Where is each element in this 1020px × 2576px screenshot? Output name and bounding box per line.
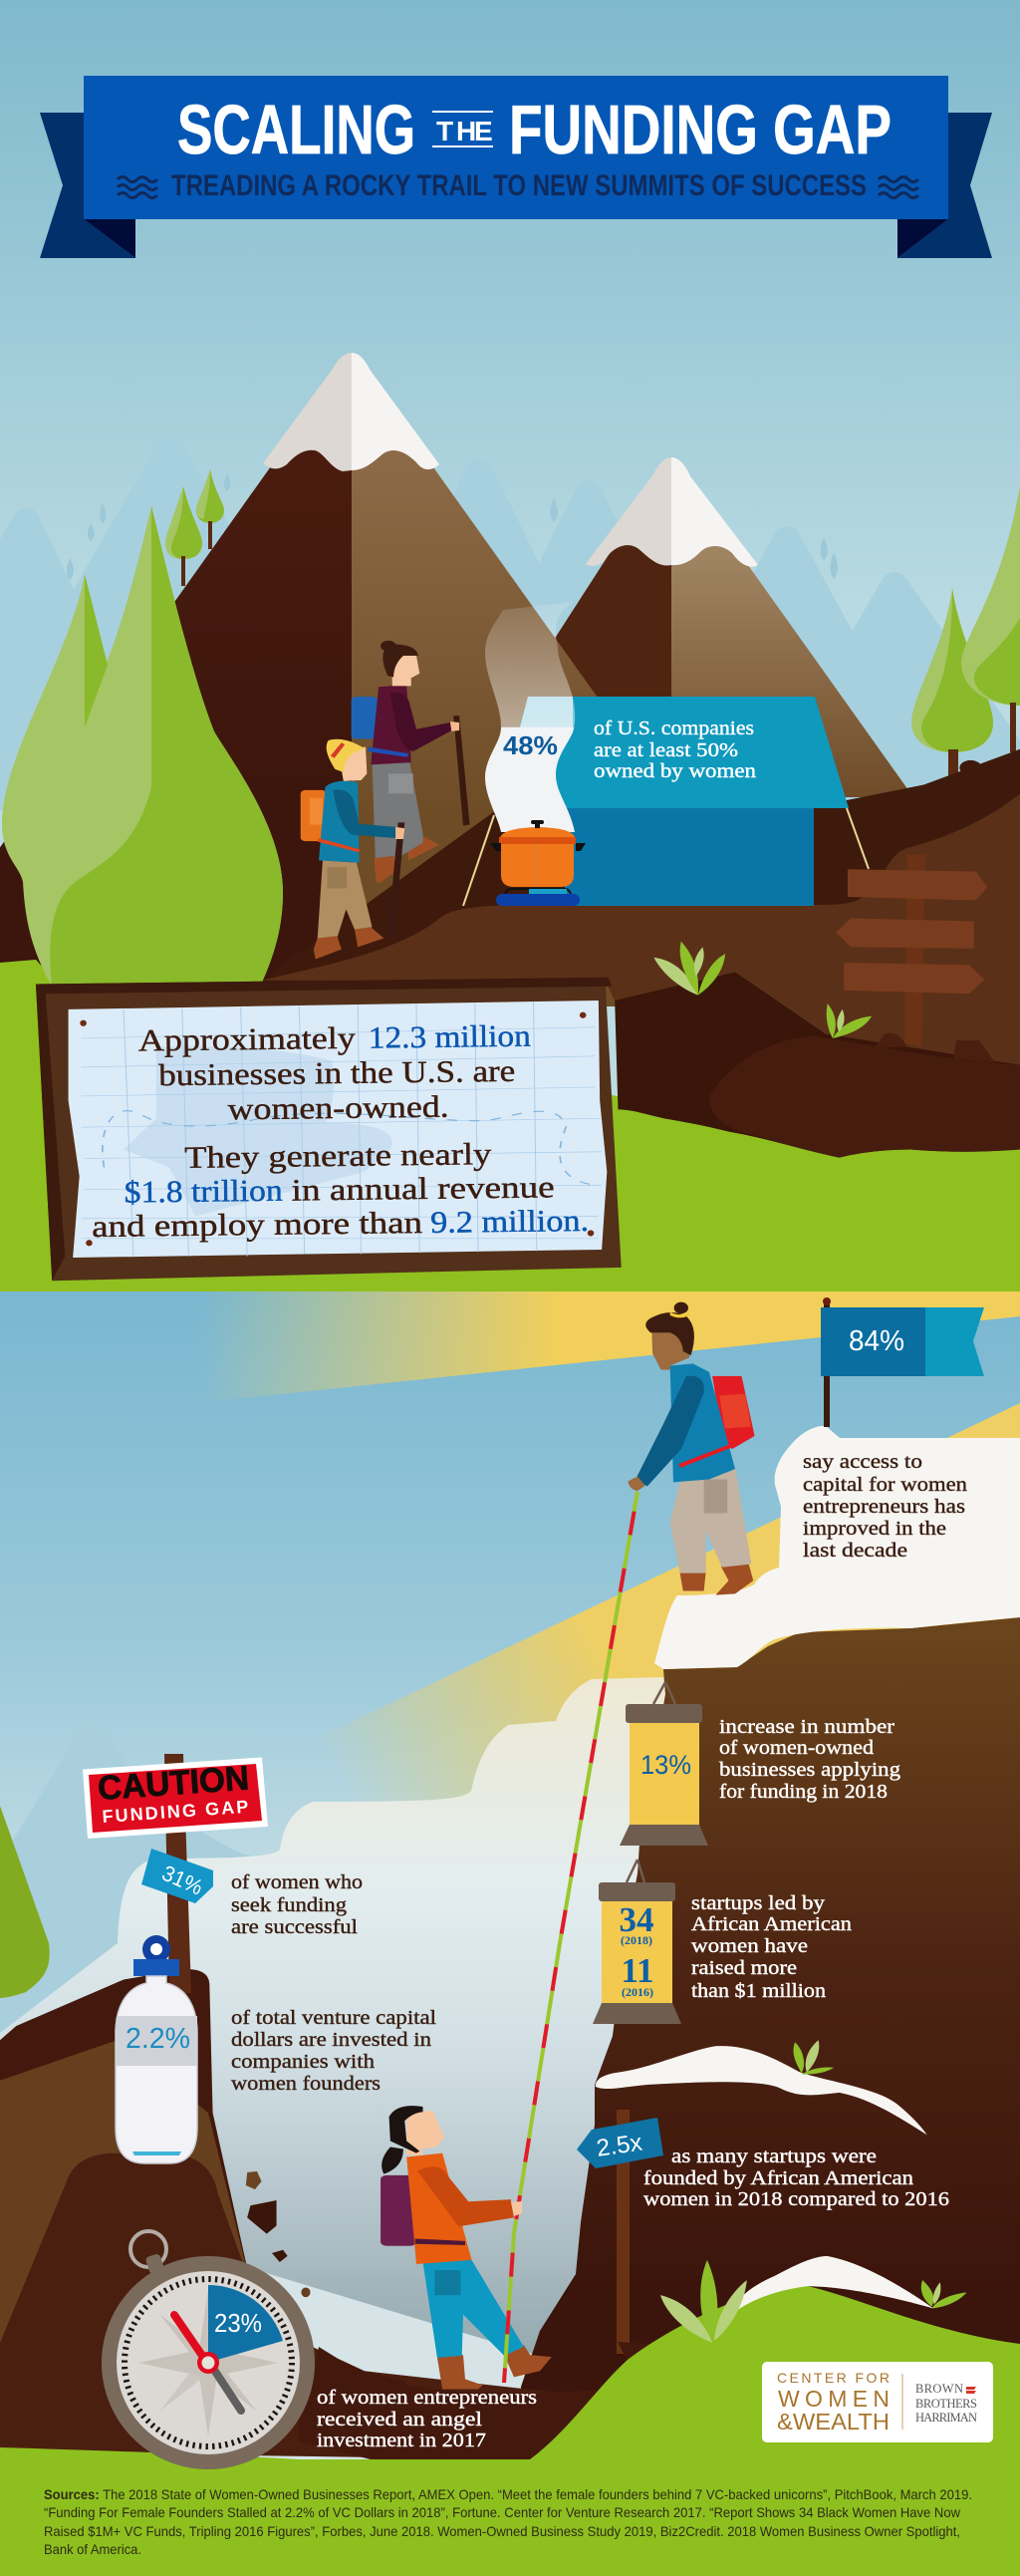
climber at summit bbox=[628, 1302, 755, 1595]
rope bbox=[504, 1492, 638, 2383]
text: 48% statistic bbox=[503, 717, 756, 782]
scroll: 34 vs 11 startups: (2018) bbox=[621, 1933, 652, 1947]
green ground: upper scene bbox=[0, 960, 1020, 1291]
distant small trees bbox=[67, 473, 838, 580]
steam rising from pot bbox=[485, 602, 575, 832]
text: 84% description: entrepreneurs has bbox=[803, 1496, 965, 1518]
text: 84% description: improved in the bbox=[803, 1518, 946, 1540]
campsite tent bbox=[463, 697, 869, 906]
caution sign: FUNDING GAP bbox=[102, 1797, 251, 1827]
left rock hill bbox=[0, 1969, 618, 2459]
logo: Center for Women & Wealth / Brown Brothers Harriman: &WEALTH bbox=[777, 2409, 890, 2434]
snow ledges and grass bbox=[596, 2040, 927, 2135]
sky: upper scene bbox=[0, 0, 1020, 1291]
text: 48% statistic: are at least 50% bbox=[594, 739, 738, 761]
flag: 84% bbox=[821, 1297, 984, 1427]
tag: 31%: 31% bbox=[158, 1860, 207, 1900]
sign with 2.5x tag: 2.5x bbox=[595, 2130, 643, 2162]
text: 31% description bbox=[231, 1871, 363, 1938]
sources bbox=[44, 2486, 972, 2557]
map text: business statistics: Approximately bbox=[138, 1020, 357, 1057]
map text: business statistics: and employ more than bbox=[92, 1205, 423, 1244]
text: startups description: African American bbox=[691, 1913, 852, 1935]
text: 13% description bbox=[719, 1716, 900, 1803]
decorative wave icons bbox=[118, 177, 918, 197]
sources: Sources: The 2018 State of Women-Owned Businesses Report, AMEX Open. “Meet the female founders behind 7 VC-backed unicorns”, PitchBook, March 2019. bbox=[44, 2486, 972, 2502]
cloud layers behind climber bbox=[0, 1677, 677, 2392]
scroll: 34 vs 11 startups: (2016) bbox=[622, 1985, 653, 1999]
scroll: 34 vs 11 startups bbox=[593, 1860, 681, 2024]
text: 23% description: received an angel bbox=[317, 2409, 483, 2431]
climber's hand on rope bbox=[511, 2201, 522, 2216]
map paper with grid and route bbox=[69, 1001, 607, 1258]
sign post: caution bbox=[164, 1754, 191, 1993]
text: 2.2% description: companies with bbox=[231, 2051, 375, 2073]
snow ledge and grass: right bbox=[660, 2256, 967, 2343]
compass: 23% bbox=[102, 2231, 315, 2469]
sources: “Funding For Female Founders Stalled at 2.2% of VC Dollars in 2018”, Fortune. Center for Venture Research 2017. “Report Shows 34 Black Women Have Now bbox=[44, 2504, 961, 2520]
snow cap on summit bbox=[654, 1426, 1020, 1669]
heading: main title: FUNDING GAP bbox=[509, 91, 892, 168]
map text: business statistics: 9.2 million. bbox=[430, 1203, 589, 1240]
logo: Center for Women & Wealth / Brown Brothers Harriman: BROTHERS bbox=[915, 2397, 977, 2411]
text: startups description bbox=[691, 1892, 852, 2002]
map text: business statistics: 12.3 million bbox=[369, 1018, 532, 1055]
sources: Raised $1M+ VC Funds, Tripling 2016 Figures”, Forbes, June 2018. Women-Owned Business Study 2019, Biz2Credit. 2018 Women Business Owner Spotlight, bbox=[44, 2523, 960, 2539]
text: 2.5x description bbox=[643, 2146, 949, 2210]
text: 13% description: businesses applying bbox=[719, 1759, 900, 1781]
text: 13% description: for funding in 2018 bbox=[719, 1781, 888, 1803]
text: 2.5x description: as many startups were bbox=[671, 2146, 877, 2167]
distant blue mountains bbox=[0, 449, 1020, 797]
map text: business statistics: businesses in the U.S. are bbox=[158, 1053, 515, 1092]
small trees behind mountain bbox=[165, 469, 224, 586]
sign with 2.5x tag bbox=[577, 2110, 663, 2354]
text: 2.2% description: of total venture capital bbox=[231, 2007, 436, 2029]
map text: business statistics bbox=[90, 1017, 589, 1244]
mountain: large peak bbox=[0, 353, 697, 1006]
ground mound under climber bbox=[299, 2342, 677, 2461]
text: 84% description: capital for women bbox=[803, 1474, 967, 1496]
green ground: lower scene bbox=[0, 2284, 1020, 2576]
text: 84% description: say access to bbox=[803, 1451, 922, 1473]
heading: main title: SCALING bbox=[177, 91, 415, 168]
text: 23% description: investment in 2017 bbox=[317, 2430, 486, 2451]
caution sign bbox=[83, 1758, 268, 1839]
text: 2.2% description: dollars are invested in bbox=[231, 2029, 431, 2051]
text: 13% description: of women-owned bbox=[719, 1737, 874, 1759]
logo: Center for Women & Wealth / Brown Brothers Harriman: HARRIMAN bbox=[915, 2411, 977, 2425]
sky: lower scene bbox=[0, 1291, 1020, 2576]
logo: Center for Women & Wealth / Brown Brothers Harriman bbox=[762, 2362, 993, 2442]
subtitle: TREADING A ROCKY TRAIL TO NEW SUMMITS OF SUCCESS bbox=[171, 169, 867, 202]
text: 48% statistic: 48% bbox=[503, 730, 558, 760]
hiker: woman with yellow hair bbox=[301, 739, 404, 959]
falling rocks bbox=[246, 2171, 409, 2388]
text: 23% description bbox=[317, 2387, 537, 2451]
distant mountain: lower left bbox=[0, 1725, 279, 2053]
scroll: 13%: 13% bbox=[640, 1750, 691, 1780]
text: 2.2% description bbox=[231, 2007, 436, 2095]
map text: business statistics: They generate nearly bbox=[184, 1136, 492, 1175]
left tree: lower scene bbox=[0, 1806, 50, 1998]
text: 31% description: are successful bbox=[231, 1916, 358, 1938]
logo: Center for Women & Wealth / Brown Brothers Harriman: WOMEN bbox=[778, 2386, 890, 2412]
text: 84% description: last decade bbox=[803, 1540, 907, 1562]
scroll: 34 vs 11 startups: 11 bbox=[621, 1951, 654, 1990]
caution sign: CAUTION bbox=[97, 1759, 250, 1808]
logo: Center for Women & Wealth / Brown Brothers Harriman: BROWN bbox=[915, 2382, 963, 2396]
compass: 23%: 23% bbox=[214, 2308, 262, 2338]
water bottle: 2.2% bbox=[116, 1935, 197, 2163]
text: 84% description bbox=[803, 1451, 967, 1562]
water bottle: 2.2%: 2.2% bbox=[126, 2023, 190, 2055]
text: 48% statistic: of U.S. companies bbox=[594, 717, 754, 739]
map text: business statistics: women-owned. bbox=[227, 1089, 449, 1126]
icon: cooking pot on burner bbox=[490, 820, 586, 906]
text: startups description: raised more bbox=[691, 1957, 797, 1979]
trail and hillside bbox=[260, 749, 1020, 1158]
foreground large tree bbox=[2, 506, 283, 987]
text: 2.5x description: women in 2018 compared to 2016 bbox=[643, 2188, 949, 2210]
sunbeam: lower bbox=[293, 1403, 1020, 1873]
scroll: 34 vs 11 startups: 34 bbox=[620, 1900, 653, 1939]
logo: Center for Women & Wealth / Brown Brothers Harriman: CENTER FOR bbox=[777, 2370, 890, 2386]
title banner bbox=[40, 76, 992, 258]
text: 23% description: of women entrepreneurs bbox=[317, 2387, 537, 2409]
text: 31% description: seek funding bbox=[231, 1894, 347, 1916]
heading: the: THE bbox=[436, 116, 493, 146]
heading: main title bbox=[177, 91, 892, 168]
climber at base bbox=[381, 2106, 552, 2390]
text: 2.5x description: founded by African American bbox=[643, 2167, 913, 2189]
text: 13% description: increase in number bbox=[719, 1716, 894, 1738]
right trees bbox=[911, 485, 1020, 781]
tag: 31% bbox=[141, 1849, 213, 1903]
scroll: 13% bbox=[620, 1682, 708, 1846]
map text: business statistics: $1.8 trillion bbox=[124, 1173, 283, 1210]
mountain: second peak bbox=[478, 457, 913, 797]
cliff rock: right bbox=[518, 1617, 1020, 2491]
sources: Bank of America. bbox=[44, 2541, 141, 2557]
sunbeam: upper bbox=[129, 1291, 1020, 1410]
text: 2.2% description: women founders bbox=[231, 2073, 381, 2095]
text: 48% statistic: owned by women bbox=[594, 760, 756, 782]
flag: 84%: 84% bbox=[849, 1325, 904, 1357]
signpost with arrows bbox=[836, 855, 995, 1062]
wooden billboard bbox=[36, 978, 622, 1281]
hiker: woman with purple top bbox=[352, 641, 470, 883]
text: 31% description: of women who bbox=[231, 1871, 363, 1893]
text: startups description: startups led by bbox=[691, 1892, 825, 1914]
map text: business statistics: in annual revenue bbox=[291, 1169, 555, 1208]
text: startups description: than $1 million bbox=[691, 1980, 826, 2002]
grass tufts bbox=[653, 942, 872, 1038]
text: startups description: women have bbox=[691, 1935, 808, 1957]
